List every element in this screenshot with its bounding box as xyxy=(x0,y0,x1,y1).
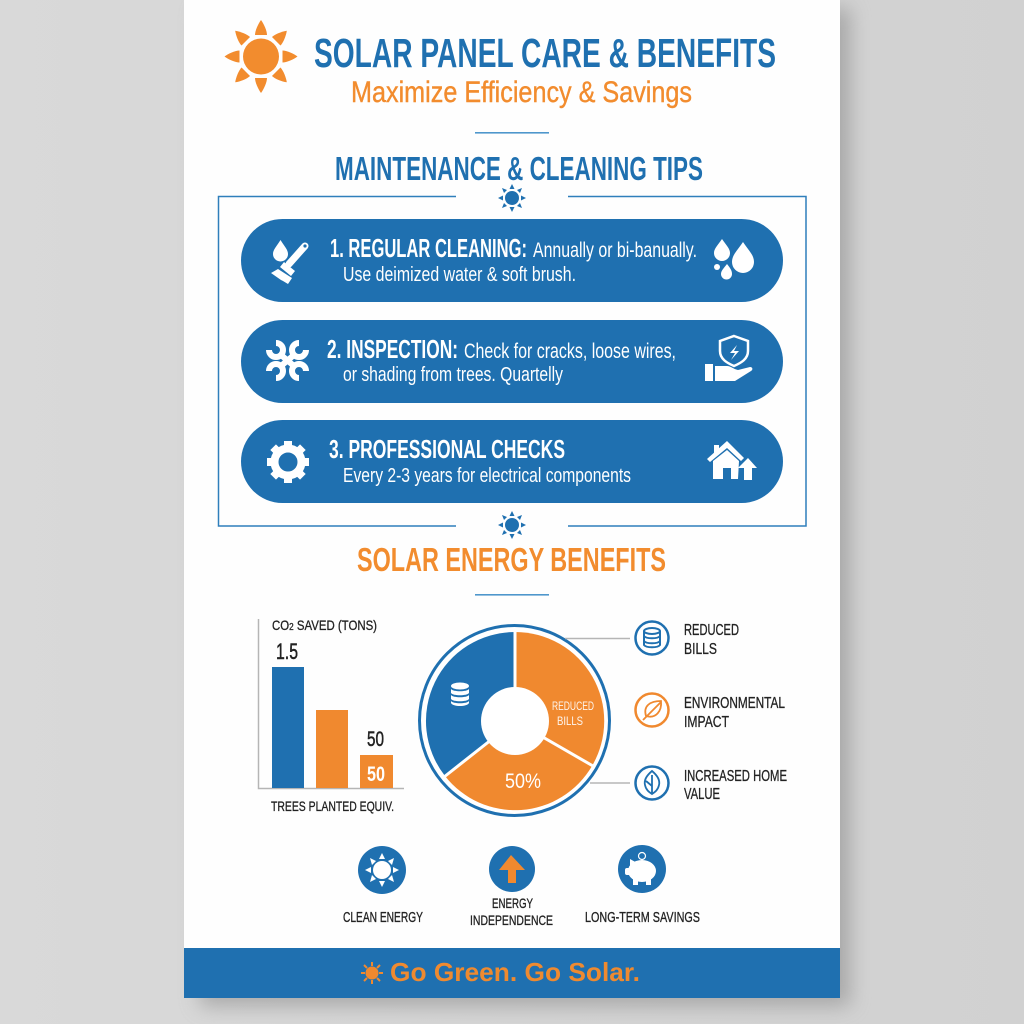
panel: regular cleaning xyxy=(241,219,783,302)
icon: small sun bottom xyxy=(498,511,526,539)
text: inspection: Check for cracks, loose wires, xyxy=(464,340,676,363)
legend item: environmental impact xyxy=(636,694,785,731)
icon: brush and drop xyxy=(271,240,307,284)
value labels xyxy=(276,639,385,786)
slice: blue xyxy=(426,632,515,776)
benefit: long-term savings xyxy=(585,845,700,926)
slice label: 50%: 50% xyxy=(505,770,541,793)
legend item: reduced bills: REDUCED xyxy=(684,622,739,639)
slice: top right xyxy=(515,632,604,766)
text: professional checks: 3. PROFESSIONAL CHECKS xyxy=(329,434,565,464)
header xyxy=(224,20,776,109)
slice label: reduced bills: REDUCED xyxy=(552,699,594,713)
panel: inspection xyxy=(241,320,783,403)
text: inspection: 2. INSPECTION: xyxy=(327,334,458,364)
legend item: increased home value xyxy=(636,766,787,803)
icon: white sun xyxy=(365,853,399,887)
subtitle: Maximize Efficiency & Savings xyxy=(351,76,692,109)
icon: piggy bank xyxy=(625,852,656,885)
icon: footer sun xyxy=(361,962,383,984)
icon: water drops xyxy=(714,239,754,280)
benefit: energy independence: ENERGY xyxy=(492,895,533,911)
icon: small sun top xyxy=(498,184,526,212)
value labels: 1.5 xyxy=(276,639,298,664)
icon: shield and hand xyxy=(705,336,752,381)
heading: maintenance: MAINTENANCE & CLEANING TIPS xyxy=(335,150,703,187)
legend item: reduced bills xyxy=(636,622,739,658)
slice: bottom xyxy=(445,721,592,810)
poster sheet xyxy=(184,0,840,998)
maintenance frame xyxy=(218,196,806,526)
heading: benefits: SOLAR ENERGY BENEFITS xyxy=(357,541,666,578)
icon: house with arrow xyxy=(707,441,757,480)
benefit: energy independence xyxy=(470,846,553,928)
slice label: reduced bills: BILLS xyxy=(557,714,583,728)
footer band xyxy=(184,948,840,998)
bar: blue xyxy=(272,667,304,788)
value labels: 50 xyxy=(367,728,384,751)
text: inspection xyxy=(327,334,676,386)
text: regular cleaning: 1. REGULAR CLEANING: xyxy=(330,233,527,263)
value labels: 50 xyxy=(367,763,385,786)
text: regular cleaning: Annually or bi-banually. xyxy=(533,239,697,262)
legend item: increased home value: VALUE xyxy=(684,786,720,803)
icon: large sun xyxy=(224,20,298,93)
donut chart xyxy=(420,626,610,816)
benefit: clean energy xyxy=(343,846,423,926)
tagline: Go Green. Go Solar. xyxy=(390,957,640,987)
legend item: increased home value: INCREASED HOME xyxy=(684,768,787,785)
benefit: long-term savings: LONG-TERM SAVINGS xyxy=(585,910,700,926)
text: regular cleaning xyxy=(330,233,697,286)
text: inspection: or shading from trees. Quartelly xyxy=(343,364,563,386)
text: professional checks xyxy=(329,434,631,487)
legend item: environmental impact: IMPACT xyxy=(684,714,729,731)
benefit: energy independence: INDEPENDENCE xyxy=(470,912,553,928)
icon: orange up arrow xyxy=(499,855,525,883)
chart title: CO2 SAVED (TONS) xyxy=(272,617,377,633)
panel: professional checks xyxy=(241,420,783,503)
legend item: environmental impact: ENVIRONMENTAL xyxy=(684,695,785,712)
bar: orange small xyxy=(360,755,393,788)
text: professional checks: Every 2-3 years for electrical components xyxy=(343,465,631,487)
chart axis label: TREES PLANTED EQUIV. xyxy=(271,798,394,814)
icon: crossed wrenches xyxy=(269,343,306,378)
slice label: reduced bills xyxy=(552,699,594,728)
legend item: reduced bills: BILLS xyxy=(684,641,717,658)
icon: gear xyxy=(267,441,309,483)
bar chart xyxy=(258,617,404,814)
benefit: clean energy: CLEAN ENERGY xyxy=(343,910,423,926)
bar: orange middle xyxy=(316,710,348,788)
icon: coins in donut xyxy=(451,682,469,706)
legend xyxy=(636,622,787,803)
text: regular cleaning: Use deimized water & soft brush. xyxy=(343,264,576,286)
title: SOLAR PANEL CARE & BENEFITS xyxy=(314,30,776,76)
